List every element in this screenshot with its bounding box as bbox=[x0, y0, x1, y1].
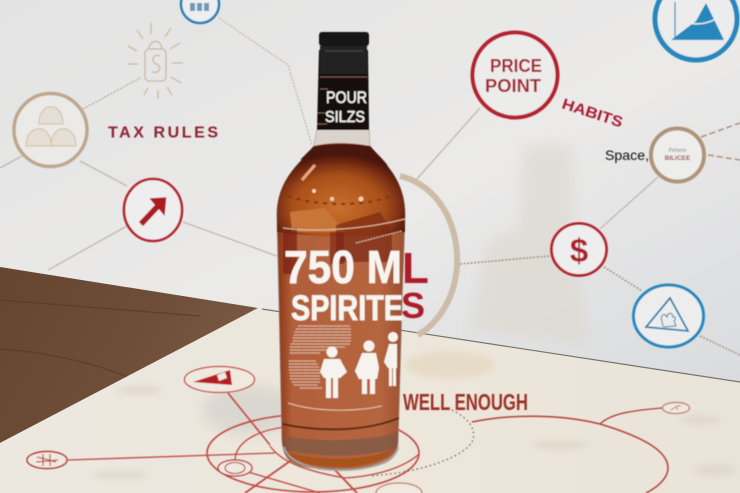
icon: top blue circle bbox=[181, 0, 219, 23]
glass base bbox=[284, 447, 398, 470]
neck label: SILZS bbox=[325, 109, 365, 126]
wall network diagram bbox=[0, 0, 740, 355]
table mat bbox=[0, 308, 740, 493]
figure three bbox=[384, 332, 398, 386]
neck label: POUR bbox=[326, 88, 367, 107]
wall text fragments behind bottle bbox=[401, 244, 429, 326]
bottle bbox=[277, 32, 405, 470]
badge: tan circle with text: BILICEE bbox=[665, 155, 691, 162]
heading: spirits: SPIRITE bbox=[291, 289, 403, 328]
wooden surface bbox=[0, 267, 258, 443]
icon: red arrow circle bbox=[124, 179, 182, 241]
target rings bbox=[68, 393, 419, 493]
dotted arc bbox=[370, 410, 474, 476]
table stains bbox=[90, 351, 737, 480]
large tan circle behind bottle bbox=[400, 176, 457, 335]
wall background bbox=[0, 0, 740, 383]
air gap in neck bbox=[314, 130, 370, 146]
table back edge bbox=[262, 309, 740, 382]
badge: tan circle with text: Pirhere bbox=[669, 148, 686, 154]
figure two bbox=[355, 340, 379, 394]
connector lines bbox=[0, 18, 740, 355]
dark band under neck bbox=[300, 144, 388, 166]
heading: well enough: WELL ENOUGH bbox=[403, 389, 528, 415]
node: bottom ellipse bbox=[376, 483, 422, 493]
shoulder liquid bbox=[277, 146, 405, 236]
liquid base bands bbox=[282, 418, 399, 467]
label: space: Space, bbox=[605, 147, 649, 163]
badge: price point bbox=[472, 32, 558, 118]
table network diagram bbox=[27, 366, 690, 493]
node: center ring icon bbox=[218, 460, 252, 476]
wood grain bbox=[0, 300, 200, 378]
icon: blue mountain circle bbox=[655, 0, 737, 60]
icon: lamp badge bbox=[127, 23, 183, 99]
node: top ellipse bbox=[184, 366, 254, 392]
badge: tan circle with text bbox=[651, 128, 704, 182]
badge: price point: PRICE bbox=[490, 56, 542, 76]
node: left ellipse bbox=[27, 452, 67, 468]
shoulder highlights bbox=[288, 165, 390, 204]
heading: 750 ml: 750 M bbox=[284, 241, 402, 293]
branch line bbox=[600, 408, 662, 424]
icon: dollar circle: $ bbox=[570, 232, 588, 269]
label: habits: HABITS bbox=[560, 96, 625, 131]
table shadow bbox=[202, 386, 298, 434]
label bottom rule bbox=[288, 403, 382, 410]
icon: tan circle with loaves bbox=[14, 94, 87, 166]
wall text fragments behind bottle: L bbox=[402, 244, 429, 293]
badge: price point: POINT bbox=[485, 76, 541, 96]
label top rule bbox=[283, 219, 405, 230]
node: right small ellipse bbox=[662, 402, 690, 414]
bottle glass bbox=[277, 130, 405, 469]
label dotted rule bbox=[356, 231, 402, 243]
icon: blue triangle circle bbox=[634, 285, 704, 347]
heading: tax rules: TAX RULES bbox=[108, 124, 218, 142]
small print blocks bbox=[289, 326, 351, 388]
icon: dollar circle bbox=[552, 224, 606, 276]
wall text fragments behind bottle: S bbox=[401, 285, 425, 326]
bottle cap bbox=[319, 32, 369, 74]
neck label bbox=[317, 50, 369, 130]
mottled reflections below shoulder bbox=[283, 208, 392, 274]
bottle shadow on wall bbox=[470, 145, 590, 345]
figures bbox=[320, 332, 398, 398]
right ring arc bbox=[472, 416, 668, 493]
figure one bbox=[320, 346, 347, 398]
